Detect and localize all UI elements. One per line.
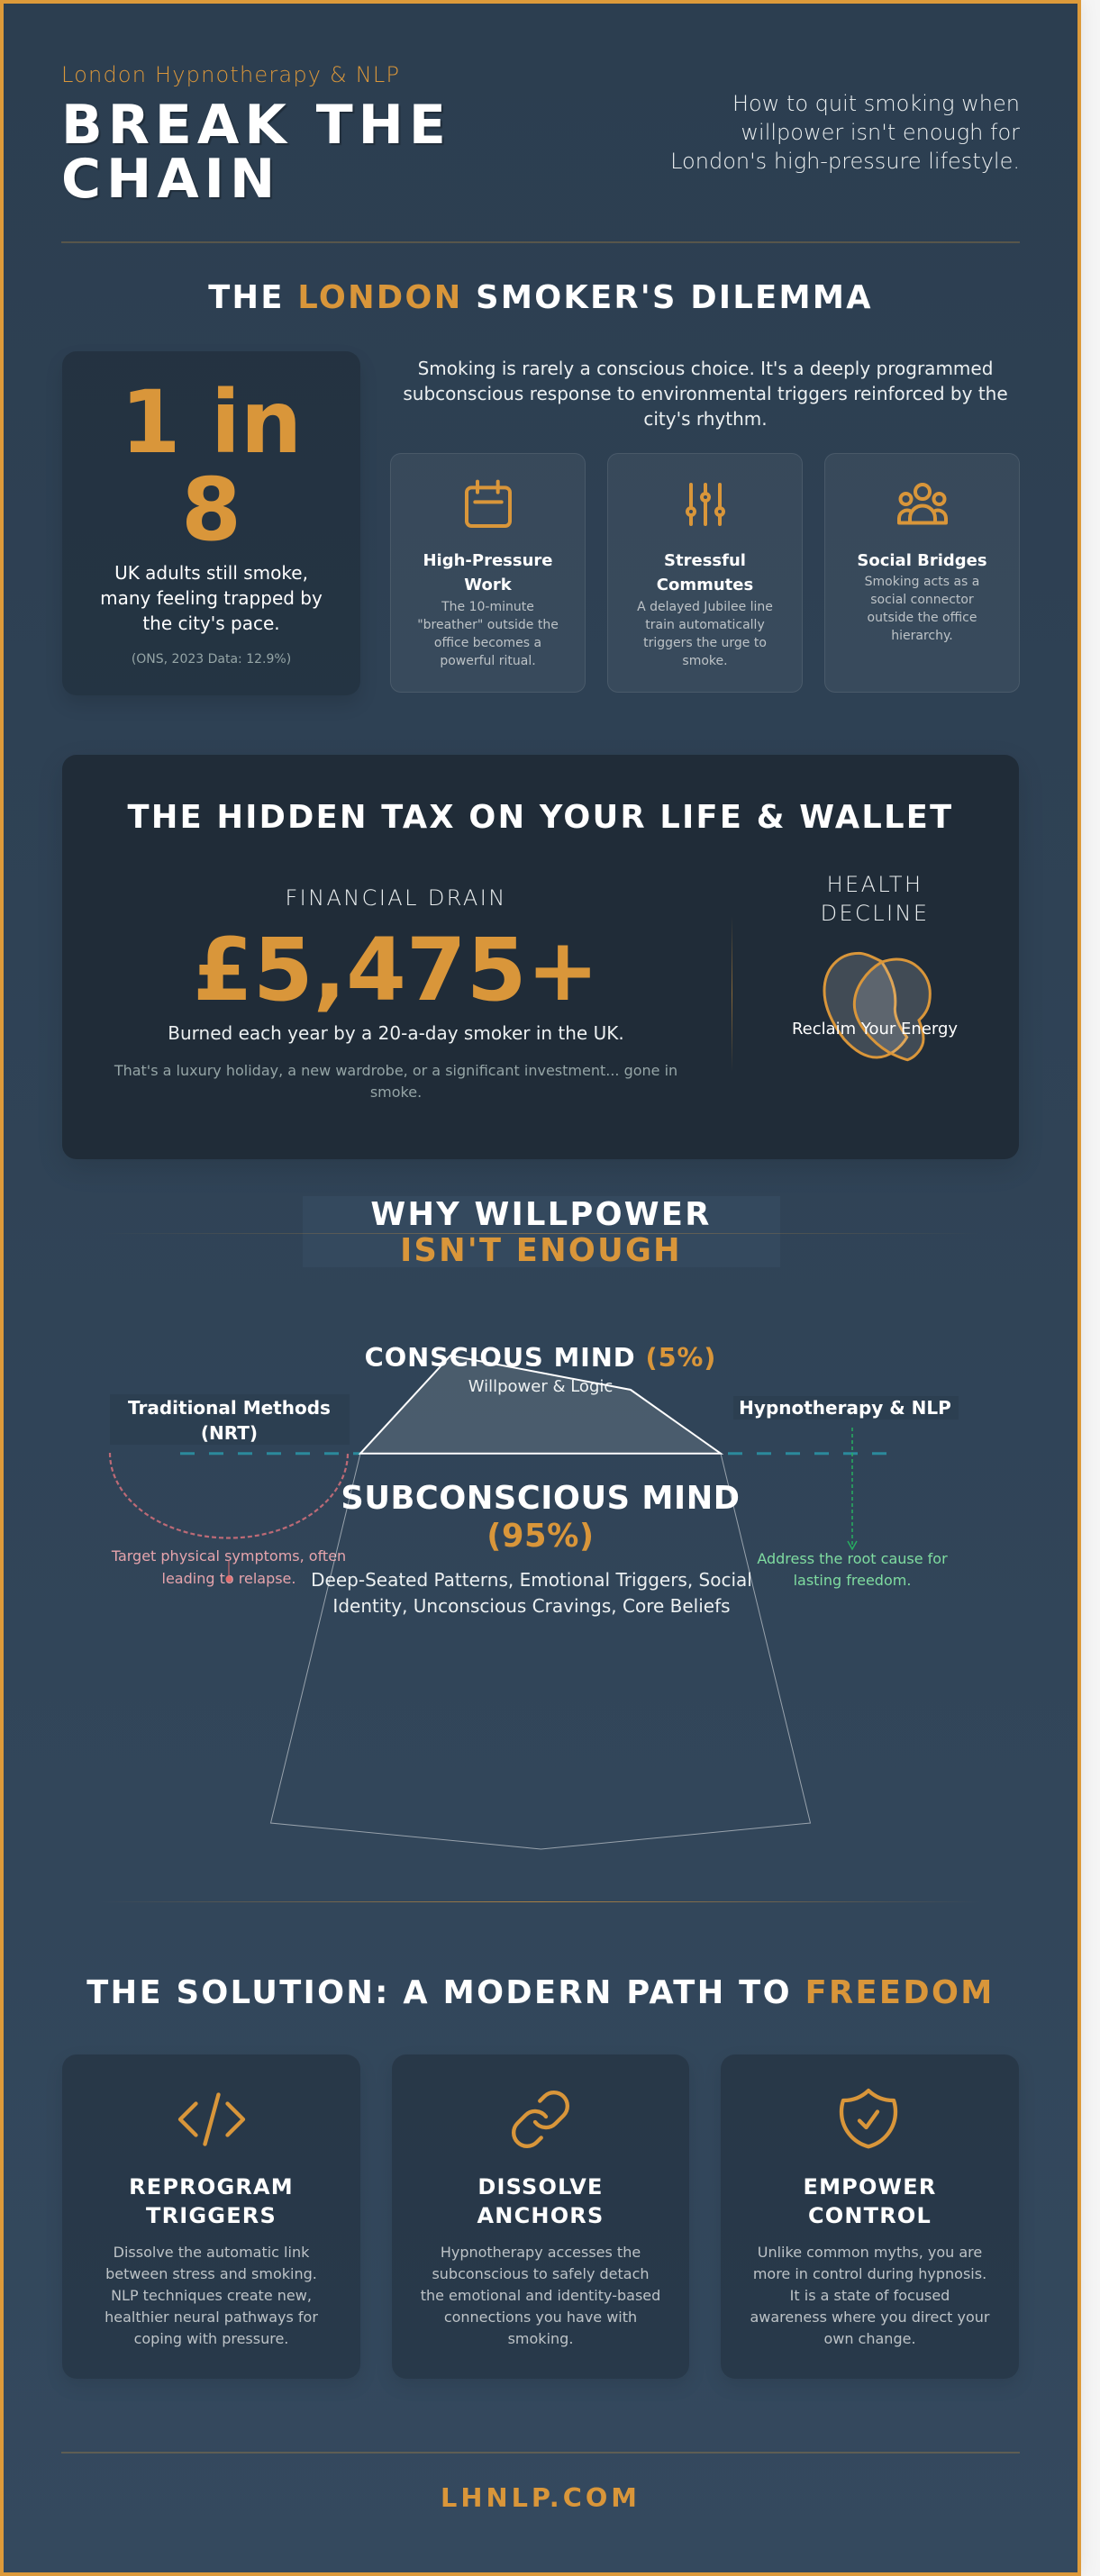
right note: lasting freedom. [794, 1572, 911, 1589]
card text: Smoking acts as a [865, 575, 979, 589]
conscious mind title: CONSCIOUS MIND (5%) [365, 1342, 716, 1373]
stat description: the city's pace. [142, 612, 280, 634]
title: CHAIN [61, 148, 280, 211]
card text: own change. [823, 2329, 916, 2347]
big stat: 8 [181, 459, 241, 560]
card text: healthier neural pathways for [105, 2308, 318, 2326]
subconscious mind caption: Identity, Unconscious Cravings, Core Beliefs [332, 1594, 731, 1616]
left note: Target physical symptoms, often [112, 1547, 346, 1565]
card text: powerful ritual. [440, 654, 536, 668]
label: health decline: DECLINE [821, 901, 929, 926]
heading: dilemma: THE LONDON SMOKER'S DILEMMA [208, 279, 873, 316]
card title: Social Bridges [857, 551, 987, 569]
icon: calendar [465, 479, 512, 528]
panel: hidden tax [62, 755, 1019, 1159]
card title [129, 2174, 294, 2228]
card text: connections you have with [444, 2308, 637, 2326]
conscious mind caption: Willpower & Logic [468, 1376, 613, 1396]
card title [477, 2174, 604, 2228]
waterline [180, 1452, 888, 1455]
card text: more in control during hypnosis. [753, 2264, 986, 2282]
stat description: many feeling trapped by [100, 587, 323, 609]
subconscious mind title: (95%) [486, 1518, 595, 1555]
card text: A delayed Jubilee line [637, 600, 773, 614]
card text: coping with pressure. [134, 2329, 288, 2347]
card text: triggers the urge to [643, 636, 767, 650]
card text: subconscious to safely detach [432, 2264, 650, 2282]
panel: reprogram triggers [62, 2054, 360, 2379]
title [61, 94, 451, 211]
red arrow [225, 1561, 232, 1582]
card text [637, 600, 773, 668]
left note [112, 1547, 346, 1587]
card text: NLP techniques create new, [111, 2286, 312, 2304]
label: financial drain: FINANCIAL DRAIN [285, 885, 507, 911]
big stat [121, 372, 302, 560]
card text: hierarchy. [891, 629, 953, 643]
label: health decline: HEALTH [827, 872, 923, 897]
card title [803, 2174, 937, 2228]
subconscious mind caption [311, 1569, 752, 1616]
card title [657, 551, 753, 594]
card text [865, 575, 979, 643]
card text: outside the office [868, 611, 977, 625]
panel: dissolve anchors [392, 2054, 689, 2379]
card text: awareness where you direct your [750, 2308, 990, 2326]
panel: stressful commutes [607, 453, 803, 693]
heading: THE HIDDEN TAX ON YOUR LIFE & WALLET [128, 799, 953, 836]
panel: 1 in 8 statistic [62, 351, 360, 695]
big stat: 1 in [121, 372, 302, 473]
card title: REPROGRAM [129, 2174, 294, 2200]
number caption: Burned each year by a 20-a-day smoker in the UK. [168, 1022, 624, 1044]
iceberg shapes and arrows [108, 1355, 886, 1850]
eyebrow: brand name: London Hypnotherapy & NLP [61, 62, 400, 87]
card text: Hypnotherapy accesses the [441, 2243, 641, 2261]
card title: DISSOLVE [477, 2174, 604, 2200]
subconscious mind caption: Deep-Seated Patterns, Emotional Triggers, Social [311, 1569, 752, 1591]
heading: why willpower [303, 1196, 780, 1267]
card title: TRIGGERS [146, 2203, 277, 2228]
subconscious mind title [341, 1480, 741, 1555]
number comparison [114, 1062, 677, 1101]
icon: people group [897, 483, 948, 524]
big number: £5,475+ [193, 920, 599, 1020]
card title: Stressful [664, 551, 746, 569]
panel: social bridges [824, 453, 1020, 693]
heading text [370, 1196, 712, 1269]
icon: sliders [686, 483, 725, 526]
card text: The 10-minute [441, 600, 534, 614]
stat source: (ONS, 2023 Data: 12.9%) [132, 652, 291, 667]
card text: Unlike common myths, you are [758, 2243, 982, 2261]
card title: EMPOWER [803, 2174, 937, 2200]
footer website: LHNLP.COM [441, 2482, 641, 2513]
subtitle: willpower isn't enough for [741, 120, 1020, 145]
card text: "breather" outside the [417, 618, 559, 632]
green arrow [848, 1428, 857, 1549]
card text [750, 2243, 990, 2347]
card title [423, 551, 553, 594]
right label text: Hypnotherapy & NLP [739, 1397, 951, 1419]
red dashed arc [110, 1453, 348, 1538]
panel: high-pressure work [390, 453, 586, 693]
right note: Address the root cause for [757, 1550, 948, 1567]
card title: CONTROL [808, 2203, 932, 2228]
heading text: WHY WILLPOWER [370, 1196, 712, 1233]
card text [105, 2243, 318, 2347]
left note: leading to relapse. [162, 1569, 295, 1587]
card text: It is a state of focused [790, 2286, 950, 2304]
left label box [110, 1394, 350, 1445]
icon: overlapping lungs [823, 951, 932, 1061]
card text: train automatically [645, 618, 765, 632]
intro text [403, 358, 1008, 430]
title: BREAK THE [61, 94, 451, 157]
icon: shield check [840, 2088, 897, 2149]
card text: the emotional and identity-based [421, 2286, 660, 2304]
intro text: city's rhythm. [643, 408, 768, 430]
card text: between stress and smoking. [105, 2264, 317, 2282]
heading: solution: THE SOLUTION: A MODERN PATH TO FREEDOM [86, 1974, 995, 2011]
number comparison: That's a luxury holiday, a new wardrobe, or a significant investment... gone in [114, 1062, 677, 1079]
card title: Work [464, 576, 512, 594]
iceberg diagram [108, 1342, 951, 1850]
subtitle [670, 91, 1020, 174]
heading text: ISN'T ENOUGH [400, 1232, 682, 1269]
card text: smoke. [682, 654, 728, 668]
card text: office becomes a [434, 636, 541, 650]
subconscious mind title: SUBCONSCIOUS MIND [341, 1480, 741, 1517]
right note [757, 1550, 948, 1589]
intro text: Smoking is rarely a conscious choice. It's a deeply programmed [418, 358, 993, 379]
right label box [733, 1396, 959, 1420]
subtitle: How to quit smoking when [732, 91, 1020, 116]
left label text: (NRT) [201, 1422, 258, 1444]
subtitle: London's high-pressure lifestyle. [670, 149, 1020, 174]
stat description [100, 562, 323, 634]
panel: empower control [721, 2054, 1019, 2379]
card text: smoking. [508, 2329, 573, 2347]
stat description: UK adults still smoke, [114, 562, 308, 584]
card title: ANCHORS [477, 2203, 604, 2228]
number comparison: smoke. [370, 1084, 422, 1101]
card text [417, 600, 559, 668]
left label text [128, 1397, 331, 1444]
icon: code [178, 2092, 245, 2146]
icon: link [512, 2091, 569, 2148]
iceberg tip [360, 1356, 721, 1454]
card text [421, 2243, 660, 2347]
card title: High-Pressure [423, 551, 553, 569]
card text: Dissolve the automatic link [114, 2243, 309, 2261]
left label text: Traditional Methods [128, 1397, 331, 1419]
health caption: Reclaim Your Energy [792, 1020, 958, 1039]
card title: Commutes [657, 576, 753, 594]
card text: social connector [870, 593, 974, 607]
iceberg base [270, 1454, 811, 1849]
intro text: subconscious response to environmental triggers reinforced by the [403, 383, 1008, 404]
label: health decline [821, 872, 929, 926]
